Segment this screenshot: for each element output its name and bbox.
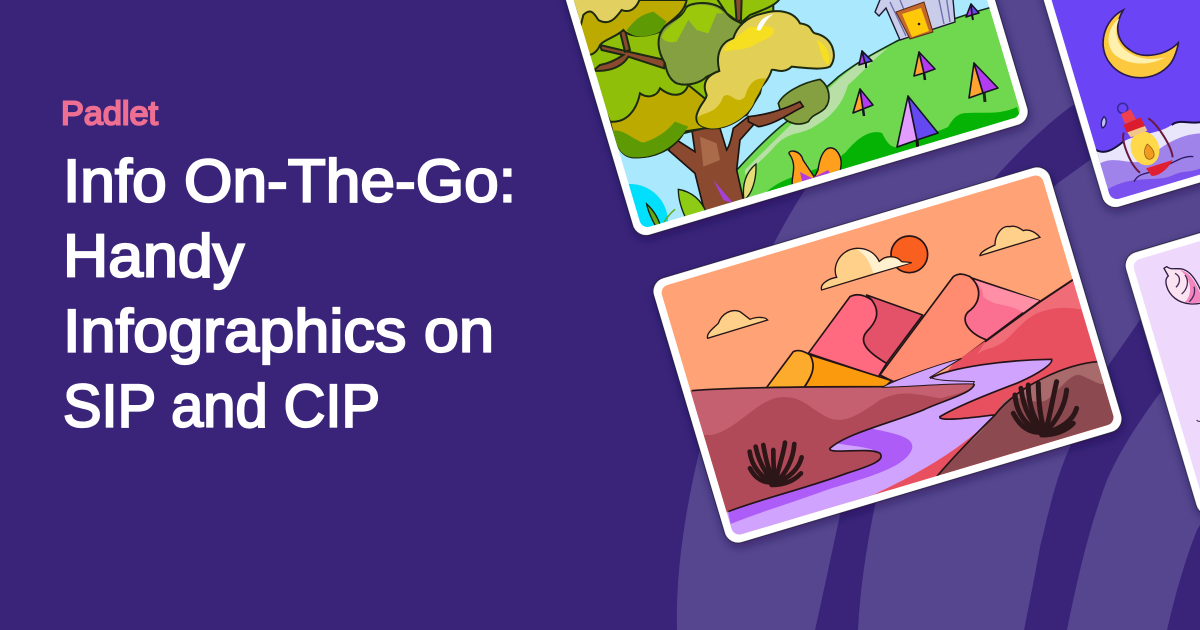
tree trunk [668, 102, 803, 220]
title: Info On-The-Go: [63, 148, 516, 214]
hill [728, 7, 1020, 204]
bush: right [1013, 382, 1077, 435]
river [707, 358, 1052, 540]
cloud: large [821, 248, 912, 290]
mountain: orange dune [766, 351, 892, 390]
mountain: right salmon [880, 274, 1039, 382]
title: Infographics on [63, 298, 494, 364]
sky [662, 176, 1114, 534]
bush: left [750, 443, 802, 485]
sun [891, 236, 928, 273]
cloud: right [980, 226, 1040, 256]
house [875, 0, 955, 40]
card: seashell [1123, 232, 1200, 518]
olive foliage clump [659, 3, 748, 85]
left tree foliage [557, 0, 780, 157]
foreground leaves [647, 164, 756, 228]
waves [1096, 120, 1200, 199]
title [63, 148, 516, 440]
logo: Padlet: Padlet [61, 94, 158, 131]
title: Handy [63, 222, 244, 290]
mountain: left pink [808, 295, 923, 377]
small foliage clump [778, 79, 829, 124]
hill: right brown [936, 361, 1114, 476]
sky [574, 0, 1020, 227]
flower [788, 147, 842, 184]
icon: seashell [1164, 267, 1200, 304]
land: left foreground [690, 384, 974, 513]
small trees [853, 4, 998, 150]
card: tree on hill [562, 0, 1033, 241]
background curved bands [677, 0, 1200, 630]
ridge: red mountain [850, 279, 1114, 502]
icon: crescent moon [1103, 10, 1178, 78]
yellow foliage clump [696, 11, 834, 128]
card: moon and lantern [1039, 0, 1200, 215]
cloud: left [707, 311, 768, 338]
card: sunset mountains and river [640, 160, 1140, 560]
icon: lantern [1101, 103, 1173, 176]
title: SIP and CIP [63, 372, 380, 440]
